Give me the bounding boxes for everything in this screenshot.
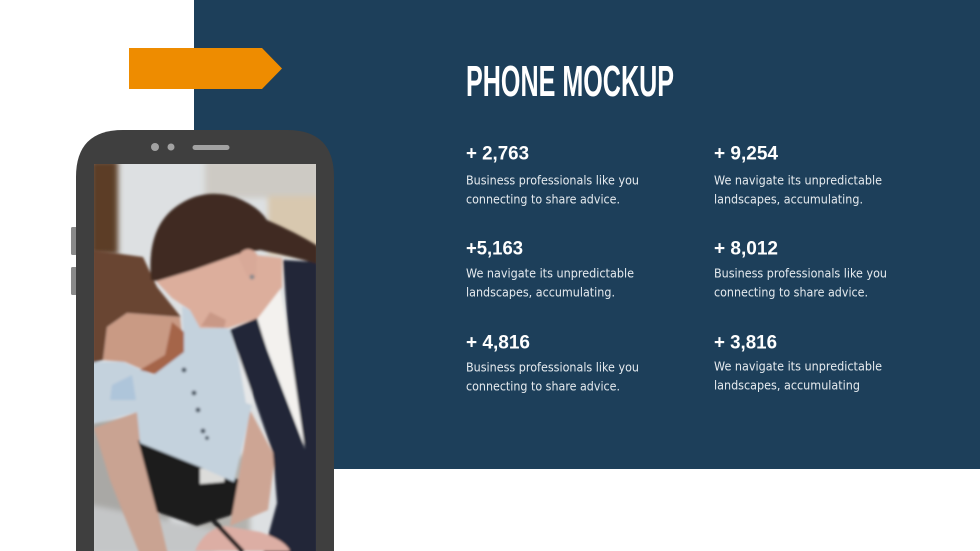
stat: 2,763: Business professionals like you <box>466 172 639 188</box>
stat: 2,763 <box>466 144 639 206</box>
stat: 5,163: +5,163 <box>466 238 523 260</box>
hands <box>195 526 290 551</box>
stat: 3,816 <box>714 332 882 392</box>
icon: phone side buttons <box>71 227 77 295</box>
stat: 8,012 <box>714 238 887 300</box>
stat: 4,816: + 4,816 <box>466 332 530 354</box>
pen <box>209 516 243 551</box>
stat: 5,163: We navigate its unpredictable <box>466 266 634 280</box>
phone mockup <box>71 130 334 551</box>
stat: 9,254: We navigate its unpredictable <box>714 172 882 188</box>
woman's face and neck <box>155 253 282 328</box>
woman's dark jacket <box>230 260 318 551</box>
woman's ear <box>239 247 258 257</box>
man's arm <box>94 412 168 551</box>
man's trousers <box>138 440 240 526</box>
woman's white shirt <box>256 287 306 449</box>
stat: 8,012: Business professionals like you <box>714 266 887 280</box>
phone body <box>76 130 334 551</box>
stat: 3,816: We navigate its unpredictable <box>714 358 882 374</box>
woman's hair and ponytail <box>150 194 318 281</box>
stat: 2,763: + 2,763 <box>466 144 529 164</box>
icon: camera dots and speaker <box>151 143 230 151</box>
panel: navy background <box>194 0 980 469</box>
man's shirt <box>92 306 252 482</box>
stat: 9,254 <box>714 144 882 206</box>
man's hair <box>92 250 181 363</box>
stat: 2,763: connecting to share advice. <box>466 192 620 206</box>
stat: 4,816: Business professionals like you <box>466 360 639 374</box>
stat: 8,012: connecting to share advice. <box>714 284 868 300</box>
man's other arm <box>230 410 275 526</box>
stat: 4,816: connecting to share advice. <box>466 378 620 394</box>
man's face <box>103 313 184 374</box>
stat: 9,254: landscapes, accumulating. <box>714 192 863 206</box>
stat: 8,012: + 8,012 <box>714 238 778 260</box>
arrow: orange banner <box>129 48 282 89</box>
stat: 9,254: + 9,254 <box>714 144 778 164</box>
stat: 4,816 <box>466 332 639 394</box>
stat: 5,163: landscapes, accumulating. <box>466 284 615 300</box>
photo: two colleagues working at a desk <box>90 160 320 551</box>
stat: 5,163 <box>466 238 634 300</box>
stat: 3,816: landscapes, accumulating <box>714 378 860 392</box>
stat: 3,816: + 3,816 <box>714 332 777 354</box>
woman's earring <box>250 274 254 280</box>
title: PHONE MOCKUP <box>466 57 674 106</box>
